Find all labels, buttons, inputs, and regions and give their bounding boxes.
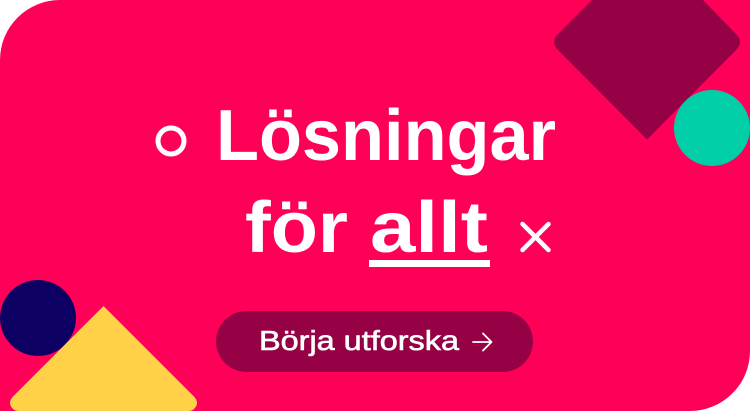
heading: second line xyxy=(245,188,490,268)
icon: arrow xyxy=(473,334,492,350)
heading: first line: Lösningar xyxy=(216,96,556,176)
button background xyxy=(216,311,533,372)
word: allt: allt xyxy=(370,188,488,268)
shape: navy circle xyxy=(0,280,76,356)
underline xyxy=(369,260,490,267)
shape: teal circle xyxy=(674,90,750,166)
button label: Börja utforska xyxy=(259,325,459,356)
shape: maroon diamond xyxy=(554,0,740,140)
shape: yellow triangle xyxy=(10,306,197,411)
word: för: för xyxy=(245,188,348,268)
icon: small ring xyxy=(158,128,184,154)
icon: cross xyxy=(522,224,548,250)
button xyxy=(216,311,533,372)
